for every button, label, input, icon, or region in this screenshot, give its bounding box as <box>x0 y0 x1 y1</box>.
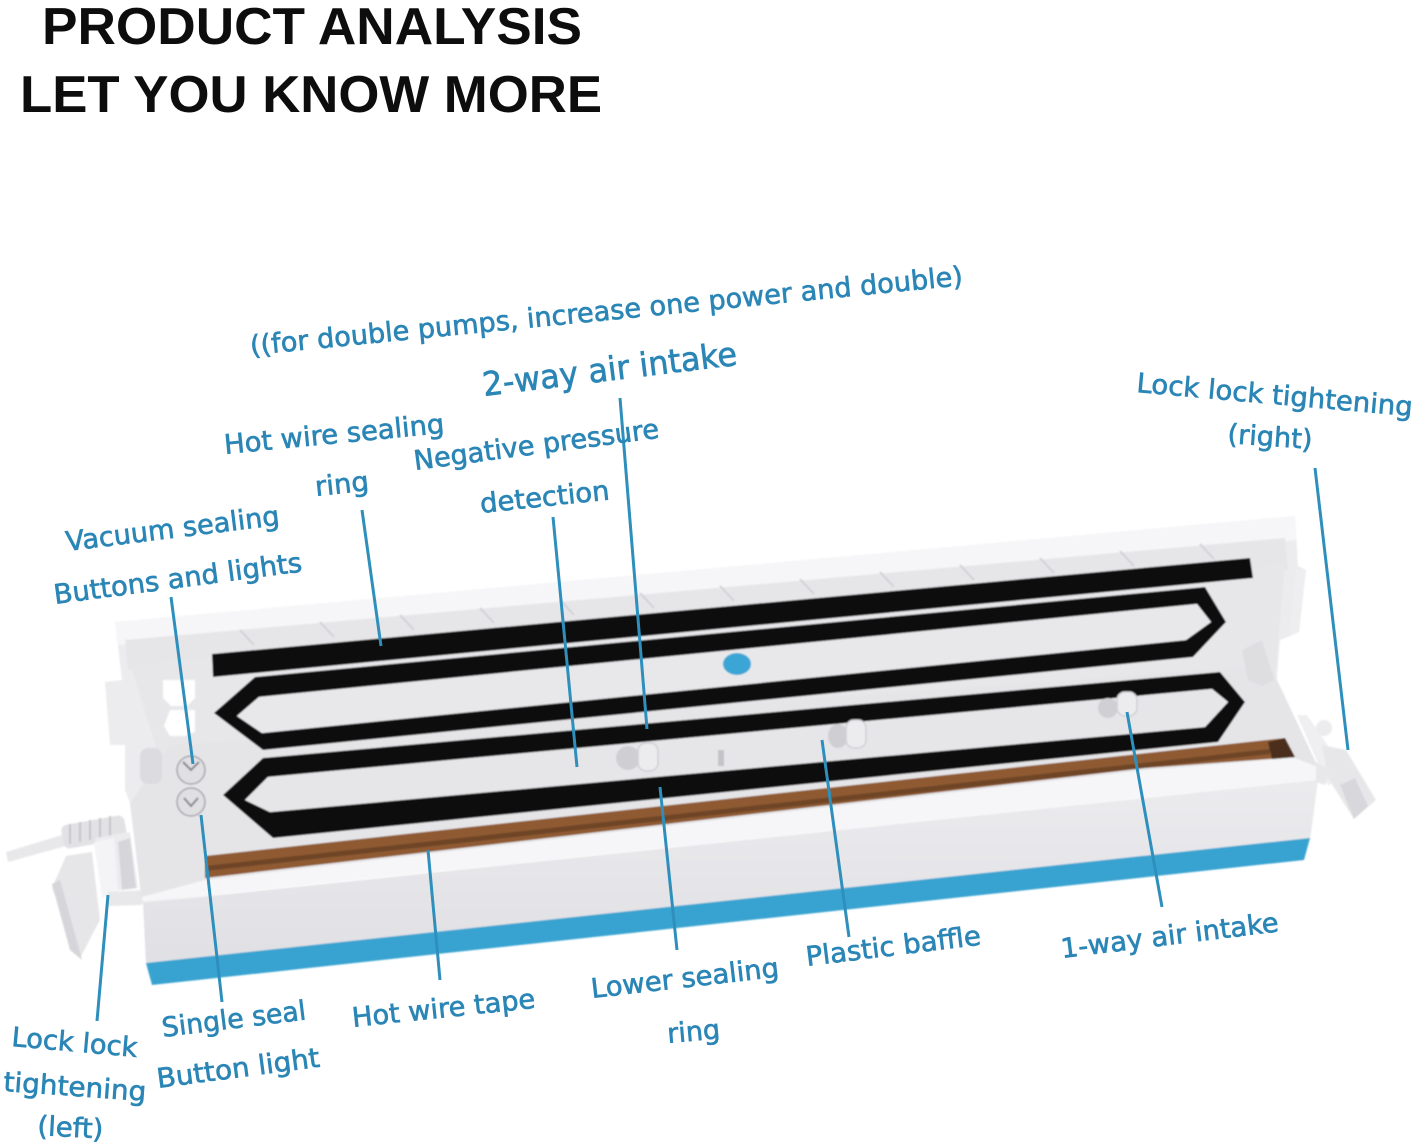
label: single seal button light: Button light <box>155 1043 322 1095</box>
lid inner area <box>130 565 1285 790</box>
label: lower sealing ring: Lower sealing <box>589 953 781 1005</box>
lid rib ticks <box>240 544 1214 645</box>
upper sealing bar <box>212 558 1253 677</box>
left lock clip <box>52 832 142 960</box>
label: single seal button light: Single seal <box>160 996 308 1044</box>
blue pressure dot <box>723 653 751 675</box>
label: vacuum sealing buttons and lights: Buttons and lights <box>52 548 304 611</box>
label: vacuum sealing buttons and lights: Vacuum sealing <box>64 501 281 558</box>
label: negative pressure detection <box>412 414 661 520</box>
tray light area <box>130 665 1318 903</box>
label: lock lock tightening left: (left) <box>37 1111 104 1145</box>
front face <box>143 780 1318 963</box>
label: lock lock tightening left <box>3 1022 147 1145</box>
title <box>20 0 602 124</box>
lid inner ribs <box>125 538 1288 670</box>
label: hot wire sealing ring <box>223 409 446 503</box>
lower gasket <box>223 672 1245 838</box>
blue base strip <box>146 838 1310 985</box>
label: lock lock tightening left: Lock lock <box>10 1022 139 1064</box>
label: 2-way air intake: 2-way air intake <box>480 334 739 404</box>
right lock clip <box>1297 715 1376 819</box>
label: hot wire tape: Hot wire tape <box>350 984 537 1034</box>
power cord and spring <box>6 815 128 862</box>
label: lock lock tightening right: (right) <box>1227 419 1313 456</box>
product illustration: vacuum sealer <box>6 516 1376 985</box>
label: lower sealing ring <box>589 953 781 1050</box>
label: hot wire sealing ring: ring <box>313 466 370 503</box>
label: negative pressure detection: detection <box>478 476 611 520</box>
label: single seal button light <box>155 996 322 1095</box>
gasket posts <box>616 692 1137 771</box>
upper gasket <box>214 587 1226 750</box>
lid cut-outs <box>163 680 195 736</box>
right side tabs <box>1242 570 1306 686</box>
label: lower sealing ring: ring <box>666 1014 721 1050</box>
label: hot wire sealing ring: Hot wire sealing <box>223 409 446 461</box>
leader lines <box>97 398 1348 1021</box>
label: plastic baffle: Plastic baffle <box>804 921 983 973</box>
label: negative pressure detection: Negative pressure <box>412 414 661 477</box>
lid top edge <box>115 516 1297 645</box>
label: lock lock tightening right: Lock lock tightening <box>1135 368 1414 423</box>
title: LET YOU KNOW MORE <box>20 66 602 124</box>
screws and button lights <box>140 748 205 816</box>
label: lock lock tightening left: tightening <box>3 1067 147 1108</box>
hot wire tape <box>205 738 1295 878</box>
label: 1-way air intake: 1-way air intake <box>1059 907 1280 965</box>
lid frame and tray <box>105 516 1318 903</box>
label: vacuum sealing buttons and lights <box>52 501 304 611</box>
label: double pumps note: ((for double pumps, increase one power and double) <box>249 261 964 362</box>
label: lock lock tightening right <box>1135 368 1414 456</box>
white lip of front face <box>142 758 1318 902</box>
